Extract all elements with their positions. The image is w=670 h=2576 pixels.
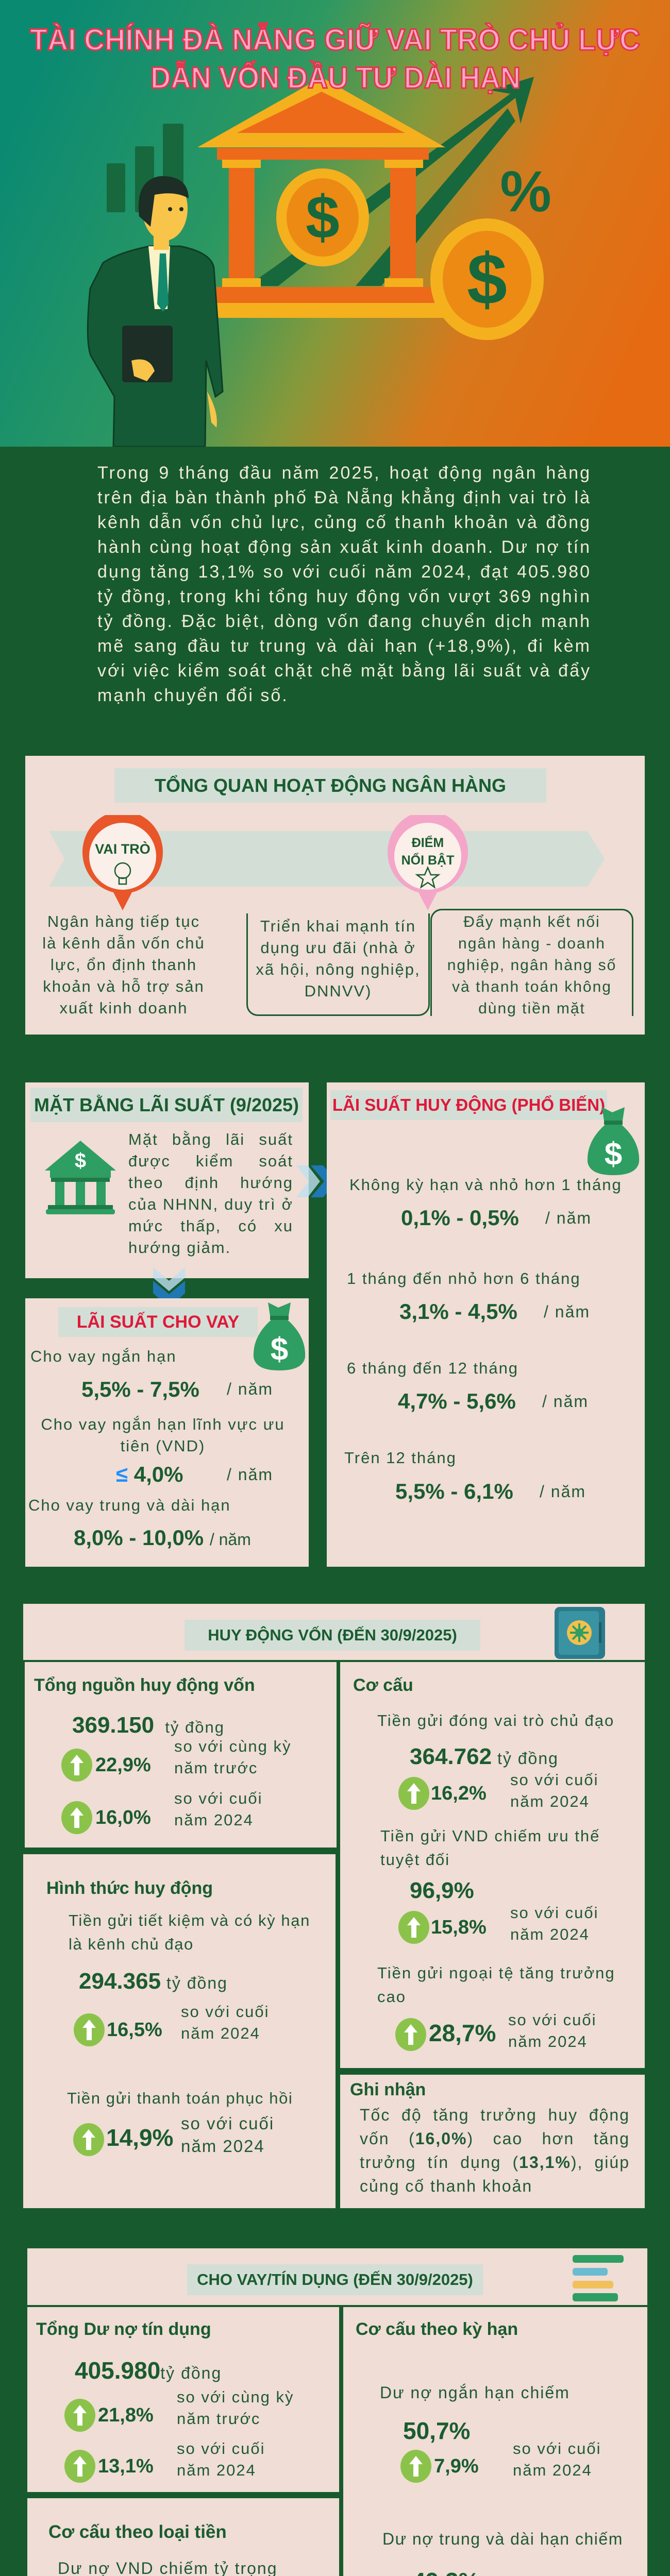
icon: bank: $ [75, 1149, 86, 1172]
stat: 22,9%: năm trước [174, 1759, 258, 1777]
stat: 22,9% [61, 1737, 292, 1782]
intro paragraph: Trong 9 tháng đầu năm 2025, hoạt động ngân hàng trên địa bàn thành phố Đà Nẵng khẳng định vai trò là kênh dẫn vốn chủ lực, củng cố thanh khoản và đồng hành cùng hoạt động sản xuất kinh doanh. Dư nợ tín dụng tăng 13,1% so với cuối năm 2024, đạt 405.980 tỷ đồng, trong khi tổng huy động vốn vượt 369 nghìn tỷ đồng. Đặc biệt, dòng vốn đang chuyển dịch mạnh mẽ sang đầu tư trung và dài hạn (+18,9%), đi kèm với việc kiểm soát chặt chẽ mặt bằng lãi suất và đẩy mạnh chuyển đổi số. [97, 463, 591, 705]
unit: năm: / năm [227, 1380, 273, 1398]
stat: 28,7% [395, 2011, 597, 2051]
panel: cơ cấu theo kỳ hạn: so với cuối [513, 2439, 601, 2458]
icon: colored bars [573, 2255, 624, 2301]
item: trên 12 tháng: Trên 12 tháng [344, 1449, 457, 1467]
stat: 7,9%: 7,9% [434, 2455, 479, 2477]
panel: tổng quan hoạt động ngân hàng [25, 756, 645, 1035]
icon: điểm nổi bật pin: ĐIỂM [412, 835, 444, 850]
icon: điểm nổi bật pin: NỔI BẬT [401, 852, 454, 868]
text block: ngắn hạn: Dư nợ ngắn hạn chiếm [380, 2383, 570, 2402]
icon: money bag: $ [271, 1332, 288, 1367]
stat: 28,7%: năm 2024 [508, 2032, 588, 2050]
stat: 16,2%: 16,2% [431, 1783, 487, 1804]
panel: cơ cấu huy động [340, 1662, 645, 2068]
panel: tổng nguồn huy động vốn: so với cuối [174, 1789, 263, 1807]
heading: huy động vốn: HUY ĐỘNG VỐN (ĐẾN 30/9/2025) [208, 1626, 457, 1644]
heading: tổng quan: TỔNG QUAN HOẠT ĐỘNG NGÂN HÀNG [155, 775, 506, 796]
stat: 13,1%: năm 2024 [177, 2461, 256, 2479]
illustration: businessman [88, 176, 223, 447]
stat: 13,1%: 13,1% [98, 2455, 154, 2477]
icon: money bag: $ [605, 1137, 622, 1172]
stat: 28,7%: so với cuối [508, 2011, 597, 2029]
value: 364.762: 364.762 tỷ đồng [410, 1744, 559, 1769]
item: không kỳ hạn: 0,1% - 0,5% [401, 1206, 519, 1230]
text block: tiền gửi chủ đạo: Tiền gửi đóng vai trò chủ đạo [377, 1711, 614, 1730]
arrow: down chevron [153, 1267, 185, 1298]
icon: bank [45, 1141, 116, 1214]
text block: ngoại tệ: cao [377, 1988, 406, 2006]
text block: VND ưu thế: tuyệt đối [380, 1851, 450, 1869]
title: TÀI CHÍNH ĐÀ NẴNG GIỮ VAI TRÒ CHỦ LỰC [30, 23, 640, 57]
stat: 14,9%: so với cuối [181, 2114, 274, 2133]
stat: 7,9% [400, 2439, 601, 2483]
timeline arrow band [49, 831, 605, 887]
text block: cho vay ngắn hạn: Cho vay ngắn hạn [30, 1347, 177, 1365]
heading: lãi suất huy động [330, 1090, 607, 1120]
item: 1-6 tháng: 3,1% - 4,5% [399, 1299, 517, 1324]
text block: trung dài hạn: Cho vay trung và dài hạn [28, 1496, 231, 1514]
heading: hình thức: Hình thức huy động [46, 1878, 213, 1898]
stat: 16,0% [61, 1789, 263, 1834]
stat: 14,9% [73, 2114, 274, 2156]
panel: mặt bằng lãi suất [25, 1082, 309, 1278]
heading: loại tiền: Cơ cấu theo loại tiền [48, 2522, 227, 2542]
item: 1-6 tháng: 1 tháng đến nhỏ hơn 6 tháng [347, 1269, 581, 1287]
item: không kỳ hạn [349, 1176, 622, 1230]
heading: tổng dư nợ: Tổng Dư nợ tín dụng [36, 2319, 211, 2339]
stat: 15,8%: so với cuối [510, 1904, 599, 1922]
item: trên 12 tháng: 5,5% - 6,1% [395, 1479, 513, 1503]
text block: tiết kiệm: là kênh chủ đạo [69, 1935, 194, 1953]
stat: 14,9%: 14,9% [106, 2124, 173, 2151]
heading: huy động vốn [185, 1620, 480, 1651]
value: 405.980: 405.980tỷ đồng [75, 2357, 222, 2384]
stat: 21,8%: năm trước [177, 2410, 260, 2428]
heading: ghi nhận: Ghi nhận [350, 2080, 426, 2099]
item: không kỳ hạn: / năm [545, 1209, 592, 1227]
panel: tổng dư nợ: so với cùng kỳ [177, 2388, 294, 2406]
rate: ≤ 4,0: ≤ 4,0% [116, 1462, 183, 1486]
heading: tổng nguồn: Tổng nguồn huy động vốn [34, 1675, 255, 1695]
heading: cho vay tín dụng: CHO VAY/TÍN DỤNG (ĐẾN 30/9/2025) [197, 2270, 473, 2289]
icon: large coin [430, 218, 544, 340]
icon: bank: $ [306, 183, 340, 251]
stat: 16,2%: so với cuối [510, 1771, 599, 1789]
unit: năm: / năm [227, 1465, 273, 1484]
value: 294.365: 294.365 tỷ đồng [79, 1969, 228, 1994]
title [30, 23, 640, 95]
item: 6-12 tháng: 6 tháng đến 12 tháng [347, 1359, 518, 1377]
heading: lãi suất huy động: LÃI SUẤT HUY ĐỘNG (PHỔ BIẾN) [332, 1095, 605, 1114]
icon: điểm nổi bật pin [388, 815, 468, 910]
value: 50,7%: 50,7% [403, 2417, 470, 2444]
icon: bank [197, 77, 445, 318]
icon: vai trò pin: VAI TRÒ [95, 841, 150, 857]
stat: 16,5%: năm 2024 [181, 2024, 260, 2042]
text block: tiết kiệm: Tiền gửi tiết kiệm và có kỳ hạn [69, 1911, 310, 1929]
item: 6-12 tháng: / năm [542, 1392, 589, 1411]
text block: kết nối ngân hàng: Đẩy mạnh kết nối ngân hàng - doanh nghiệp, ngân hàng số và thanh toán không dùng tiền mặt [447, 913, 616, 1017]
panel: ghi nhận [340, 2075, 645, 2208]
text block: vai trò: Ngân hàng tiếp tục là kênh dẫn vốn chủ lực, ổn định thanh khoản và hỗ trợ sản xuất kinh doanh [42, 912, 205, 1017]
text block: trung dài hạn: Dư nợ trung và dài hạn chiếm [382, 2530, 623, 2548]
icon: money bag [588, 1107, 639, 1175]
heading: cơ cấu: Cơ cấu [353, 1675, 413, 1695]
panel: cơ cấu theo loại tiền [27, 2498, 339, 2576]
icon: money bag [254, 1302, 305, 1370]
panel: lãi suất huy động [327, 1082, 645, 1567]
stat: 13,1% [64, 2439, 265, 2483]
text block: VND ưu thế: Tiền gửi VND chiếm ưu thế [380, 1827, 600, 1845]
item: không kỳ hạn: Không kỳ hạn và nhỏ hơn 1 tháng [349, 1176, 622, 1194]
stat: 15,8%: 15,8% [431, 1917, 487, 1938]
icon: vai trò pin [82, 815, 163, 910]
panel: cho vay header [27, 2248, 647, 2305]
hero illustration with title [0, 0, 670, 447]
stat: 16,5%: 16,5% [107, 2019, 162, 2041]
item: trên 12 tháng: / năm [540, 1482, 586, 1501]
icon: bar chart [107, 124, 183, 212]
panel: hình thức huy động [23, 1854, 336, 2208]
panel: hình thức huy động: so với cuối [181, 2003, 270, 2021]
heading: mặt bằng lãi suất [30, 1088, 303, 1122]
text block: thanh toán: Tiền gửi thanh toán phục hồi [67, 2089, 293, 2107]
rate: 5,5-7,5: 5,5% - 7,5% [81, 1377, 199, 1401]
panel: tổng dư nợ [27, 2307, 339, 2492]
stat: 15,8%: năm 2024 [510, 1925, 590, 1943]
panel: cơ cấu theo kỳ hạn [343, 2307, 647, 2576]
panel: tổng dư nợ: so với cuối [177, 2439, 265, 2458]
stat: 14,9%: năm 2024 [181, 2137, 265, 2156]
stat: 16,0%: 16,0% [95, 1807, 151, 1828]
heading: lãi suất cho vay [58, 1307, 258, 1337]
icon: percent: % [500, 159, 551, 224]
text block: VND ưu thế [380, 1827, 600, 1869]
stat: 15,8% [398, 1904, 599, 1944]
panel: tổng nguồn huy động vốn [25, 1662, 337, 1848]
value: 96,9%: 96,9% [410, 1878, 474, 1903]
stat: 16,2%: năm 2024 [510, 1792, 590, 1810]
item: trên 12 tháng [344, 1449, 586, 1503]
text block: tiết kiệm [69, 1911, 310, 1953]
stat: 28,7%: 28,7% [429, 2020, 496, 2046]
icon: large coin: $ [467, 239, 507, 319]
icon: safe [555, 1607, 605, 1659]
text block: ngoại tệ: Tiền gửi ngoại tệ tăng trưởng [377, 1964, 615, 1982]
icon: growth arrow [247, 77, 534, 286]
text block: ưu tiên: Cho vay ngắn hạn lĩnh vực ưu tiên (VND) [41, 1415, 285, 1455]
panel: lãi suất cho vay [25, 1298, 309, 1567]
arrow: right chevron [296, 1165, 327, 1197]
panel: huy động vốn header [23, 1604, 645, 1660]
stat: 22,9%: 22,9% [95, 1754, 151, 1776]
stat: 7,9%: năm 2024 [513, 2461, 592, 2479]
text block: ghi nhận: Tốc độ tăng trưởng huy động vốn (16,0%) cao hơn tăng trưởng tín dụng (13,1%), giúp củng cố thanh khoản [360, 2106, 630, 2195]
stat: 21,8%: 21,8% [98, 2404, 154, 2426]
item: 6-12 tháng [347, 1359, 589, 1413]
heading: tổng quan [114, 768, 546, 803]
item: 1-6 tháng: / năm [544, 1302, 590, 1321]
heading: mặt bằng lãi suất: MẶT BẰNG LÃI SUẤT (9/2025) [34, 1094, 299, 1115]
item: 6-12 tháng: 4,7% - 5,6% [398, 1389, 516, 1413]
heading: lãi suất cho vay: LÃI SUẤT CHO VAY [77, 1312, 239, 1332]
heading: cho vay tín dụng [187, 2264, 483, 2295]
title: DẪN VỐN ĐẦU TƯ DÀI HẠN [150, 61, 521, 95]
rate: 8-10: 8,0% - 10,0% / năm [74, 1526, 251, 1550]
value: 369.150: 369.150 tỷ đồng [72, 1713, 225, 1738]
stat: 16,2% [398, 1771, 599, 1810]
stat: 16,0%: năm 2024 [174, 1811, 254, 1829]
heading: kỳ hạn: Cơ cấu theo kỳ hạn [356, 2319, 518, 2339]
stat: 21,8% [64, 2388, 294, 2432]
item: 1-6 tháng [347, 1269, 590, 1324]
text block: ngoại tệ [377, 1964, 615, 2006]
text block: mặt bằng description: Mặt bằng lãi suất được kiểm soát theo định hướng của NHNN, duy trì ở mức thấp, có xu hướng giảm. [128, 1130, 293, 1257]
stat: 16,5% [74, 2003, 270, 2046]
panel: tổng nguồn huy động vốn: so với cùng kỳ [174, 1737, 292, 1755]
text block: tín dụng ưu đãi: Triển khai mạnh tín dụng ưu đãi (nhà ở xã hội, nông nghiệp, DNNVV) [256, 917, 421, 1000]
